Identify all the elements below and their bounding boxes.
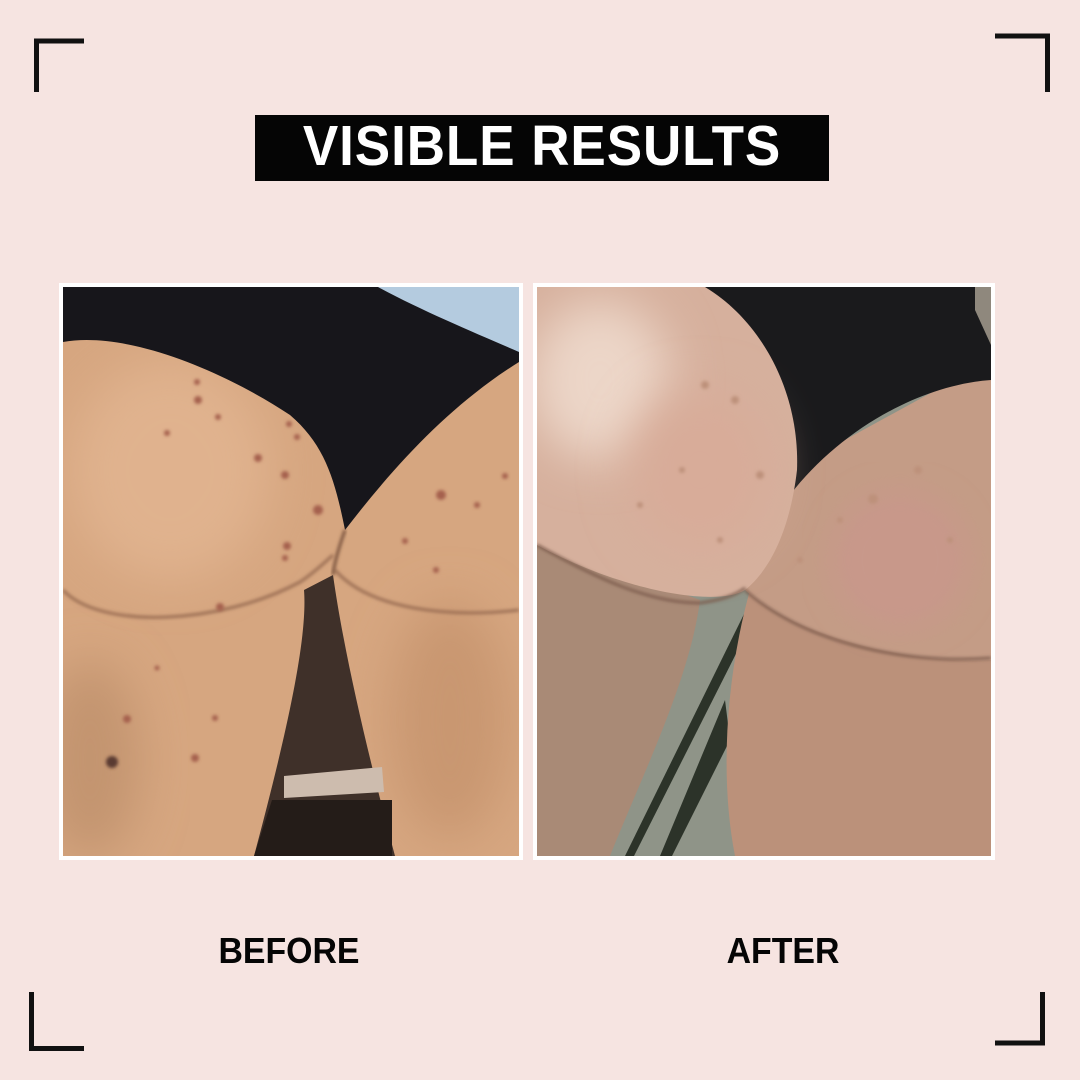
right form (745, 360, 991, 661)
label: after: AFTER (727, 930, 839, 971)
panel: before photo (59, 283, 523, 860)
corner bracket: top left (34, 38, 84, 92)
garment (700, 287, 991, 495)
corner bracket: bottom right (995, 992, 1045, 1046)
corner bracket: top right (995, 34, 1050, 92)
title: VISIBLE RESULTS (303, 114, 781, 178)
thighs (537, 540, 700, 856)
panel: after photo (533, 283, 995, 860)
background stems (625, 612, 748, 856)
corner bracket: bottom left (29, 992, 84, 1051)
garment (63, 287, 519, 530)
creases (745, 590, 991, 659)
faded spots (637, 381, 953, 563)
background gap (254, 575, 395, 856)
label: before: BEFORE (218, 930, 360, 971)
left form (537, 287, 797, 597)
creases (63, 555, 333, 617)
spots (106, 379, 508, 768)
